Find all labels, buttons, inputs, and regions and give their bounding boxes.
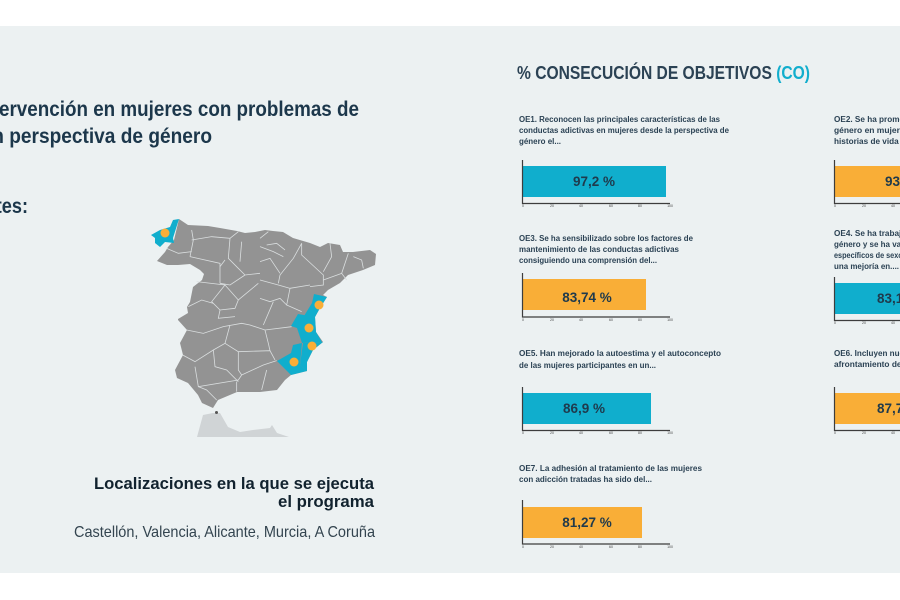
- map of Spain: [151, 219, 376, 437]
- locations caption: [74, 475, 375, 541]
- A Coruña: [151, 219, 179, 247]
- panel: OE5: de las mujeres participantes en un...: [519, 360, 656, 370]
- panel: OE4: 40: [891, 321, 895, 325]
- panel: OE5: OE5. Han mejorado la autoestima y el autoconcepto: [519, 348, 721, 358]
- panel: OE3: 0: [522, 318, 524, 322]
- panel: OE6: 20: [862, 431, 866, 435]
- panel: OE1: OE1. Reconocen las principales características de las: [519, 114, 720, 124]
- panel: OE7: 40: [579, 545, 583, 549]
- coast of Africa: [197, 413, 289, 437]
- panel: OE3: mantenimiento de las conductas adictivas: [519, 244, 679, 254]
- panel: OE2: 20: [862, 204, 866, 208]
- locations caption: Localizaciones en la que se ejecuta: [94, 475, 375, 493]
- panel: OE1: 40: [579, 204, 583, 208]
- panel: OE1: género el...: [519, 136, 561, 146]
- panel: OE1: [519, 114, 729, 208]
- panel: OE3: [519, 233, 693, 322]
- panel: OE5: 40: [579, 431, 583, 435]
- panel: OE3: 100: [667, 318, 673, 322]
- Alicante: [300, 342, 323, 371]
- provinces in grey: [157, 219, 376, 408]
- panel: OE3: consiguiendo una comprensión del...: [519, 255, 657, 265]
- panel: OE7: [519, 463, 702, 549]
- panel: OE7: 100: [667, 545, 673, 549]
- panel: OE7: 60: [609, 545, 613, 549]
- panel: OE4: 0: [834, 321, 836, 325]
- heading: % consecución de objetivos: % CONSECUCIÓN DE OBJETIVOS (CO): [517, 62, 810, 83]
- panel: OE5: 0: [522, 431, 524, 435]
- panel: OE1: 20: [550, 204, 554, 208]
- panel: OE1: 80: [638, 204, 642, 208]
- panel: OE7: 0: [522, 545, 524, 549]
- province borders: [167, 230, 363, 400]
- Valencia: [291, 314, 322, 343]
- panel: OE6: [834, 348, 900, 435]
- Castellón: [304, 294, 327, 317]
- panel: OE7: 80: [638, 545, 642, 549]
- panel: OE7: 81,27 %: [562, 515, 612, 530]
- panel: OE6: 0: [834, 431, 836, 435]
- panel: OE7: OE7. La adhesión al tratamiento de las mujeres: [519, 463, 702, 473]
- panel: OE3: 80: [638, 318, 642, 322]
- panel: OE4: [834, 228, 900, 325]
- panel: OE1: conductas adictivas en mujeres desde la perspectiva de: [519, 125, 729, 135]
- panel: OE1: 60: [609, 204, 613, 208]
- Ceuta dot: [215, 411, 218, 414]
- panel: OE7: 20: [550, 545, 554, 549]
- panel: OE2: 0: [834, 204, 836, 208]
- panel: OE5: 100: [667, 431, 673, 435]
- panel: OE1: 100: [667, 204, 673, 208]
- locations caption: el programa: [278, 493, 375, 511]
- location markers: [160, 228, 324, 366]
- heading: program title: [0, 98, 359, 148]
- panel: OE3: 40: [579, 318, 583, 322]
- highlighted provinces in blue: [151, 219, 327, 375]
- panel: OE2: [834, 114, 900, 208]
- panel: OE5: 20: [550, 431, 554, 435]
- panel: OE5: 80: [638, 431, 642, 435]
- panel: OE3: 60: [609, 318, 613, 322]
- panel: OE2: 40: [891, 204, 895, 208]
- panel: OE1: 97,2 %: [573, 174, 615, 189]
- Murcia: [277, 343, 307, 375]
- panel: OE3: 20: [550, 318, 554, 322]
- panel: OE5: 60: [609, 431, 613, 435]
- panel: OE4: 20: [862, 321, 866, 325]
- locations caption: Castellón, Valencia, Alicante, Murcia, A Coruña: [74, 524, 375, 541]
- panel: OE5: [519, 348, 721, 435]
- panel: OE6: 40: [891, 431, 895, 435]
- panel: OE3: 83,74 %: [562, 290, 612, 305]
- panel: OE1: 0: [522, 204, 524, 208]
- panel: OE7: con adicción tratadas ha sido del...: [519, 474, 652, 484]
- panel: OE3: OE3. Se ha sensibilizado sobre los factores de: [519, 233, 693, 243]
- panel: OE5: 86,9 %: [563, 401, 605, 416]
